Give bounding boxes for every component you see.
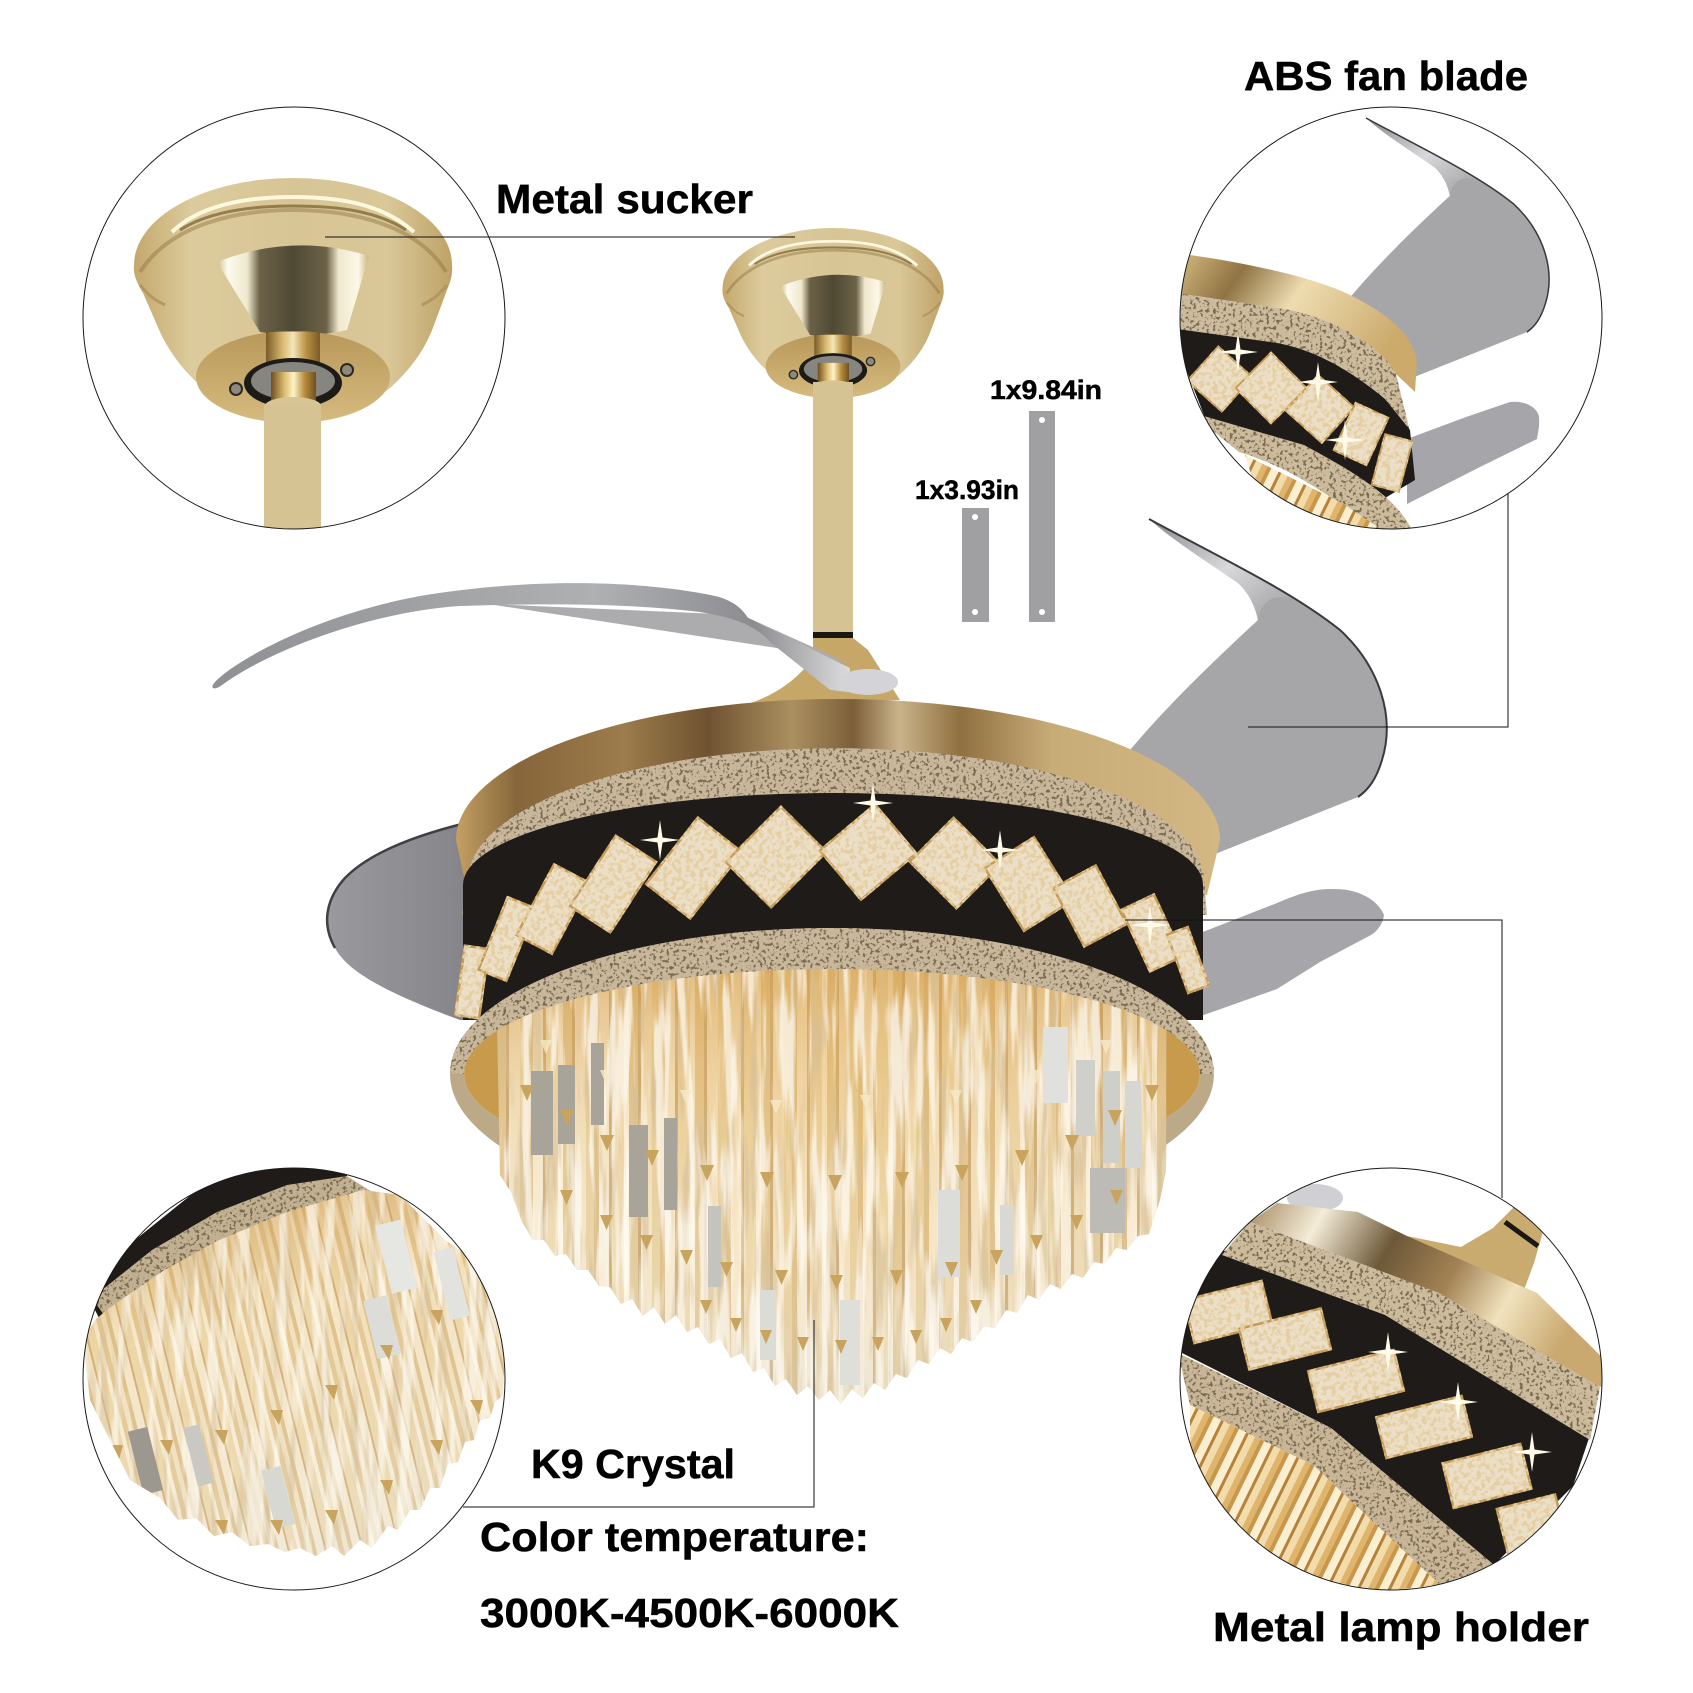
decorated rim [1222,1222,1600,1440]
leader line: metal sucker [325,236,795,238]
main product: ceiling fan with crystal chandelier [212,228,1387,1410]
hub and rod [1408,1208,1543,1288]
leader line: metal lamp holder [1125,920,1502,1198]
text: Color temperature: Color temperature: [480,1514,869,1560]
inset circle: K9 crystal [82,1168,506,1590]
label: 1x9.84in: 1x9.84in [990,375,1102,405]
metal extension rods [962,411,1055,622]
black drum edge [90,1160,347,1320]
inset crystal diamonds [1188,347,1412,492]
fan blade: left [327,822,520,1020]
heading: Metal sucker: Metal sucker [496,176,753,222]
black drum [463,793,1203,1020]
crystal diamonds [455,804,1209,1018]
fan blade: lower right [1195,889,1384,1016]
clear hub [1287,1184,1343,1209]
fan blade: top right [1120,519,1387,860]
tier edges of prism tips [520,1085,1159,1354]
black strip [1170,1250,1590,1565]
inset circle: metal lamp holder [1170,1168,1610,1600]
sparkles [640,783,1170,945]
crystal rectangles [1184,1281,1567,1558]
lower ring [1178,1353,1494,1585]
sparkles [1368,1332,1552,1472]
inset circle: metal sucker [83,107,505,532]
gold band detail [1170,250,1417,392]
rod 1x3.93in [962,508,989,622]
crystal prisms [497,969,1167,1404]
decorated upper rim [462,748,1207,915]
inset circle: ABS fan blade [1170,107,1602,540]
lower crystals [1190,1405,1440,1600]
downrod [748,382,900,704]
rod 1x9.84in [1029,411,1055,622]
leader line: ABS fan blade [1248,494,1508,727]
heading: K9 Crystal: K9 Crystal [531,1441,735,1487]
label: 1x3.93in: 1x3.93in [915,475,1019,505]
crystal ring [92,1176,372,1315]
gold motor band [456,699,1220,895]
gold band [1250,1203,1610,1390]
mirrored grey prisms [531,1027,1141,1385]
heading: ABS fan blade: ABS fan blade [1244,53,1528,99]
gold inner bowl [464,969,1200,1179]
leader line: K9 crystal [463,1320,814,1507]
rear part of lower ring [450,928,1214,1220]
fan blade: top left [212,583,898,695]
text: colour temperature values: 3000K-4500K-6000K [480,1590,899,1636]
front part of lower decorated ring [450,928,1214,1074]
heading: Metal lamp holder: Metal lamp holder [1213,1604,1589,1650]
crystal prism close-up [85,1190,504,1556]
ceiling canopy [722,228,944,398]
